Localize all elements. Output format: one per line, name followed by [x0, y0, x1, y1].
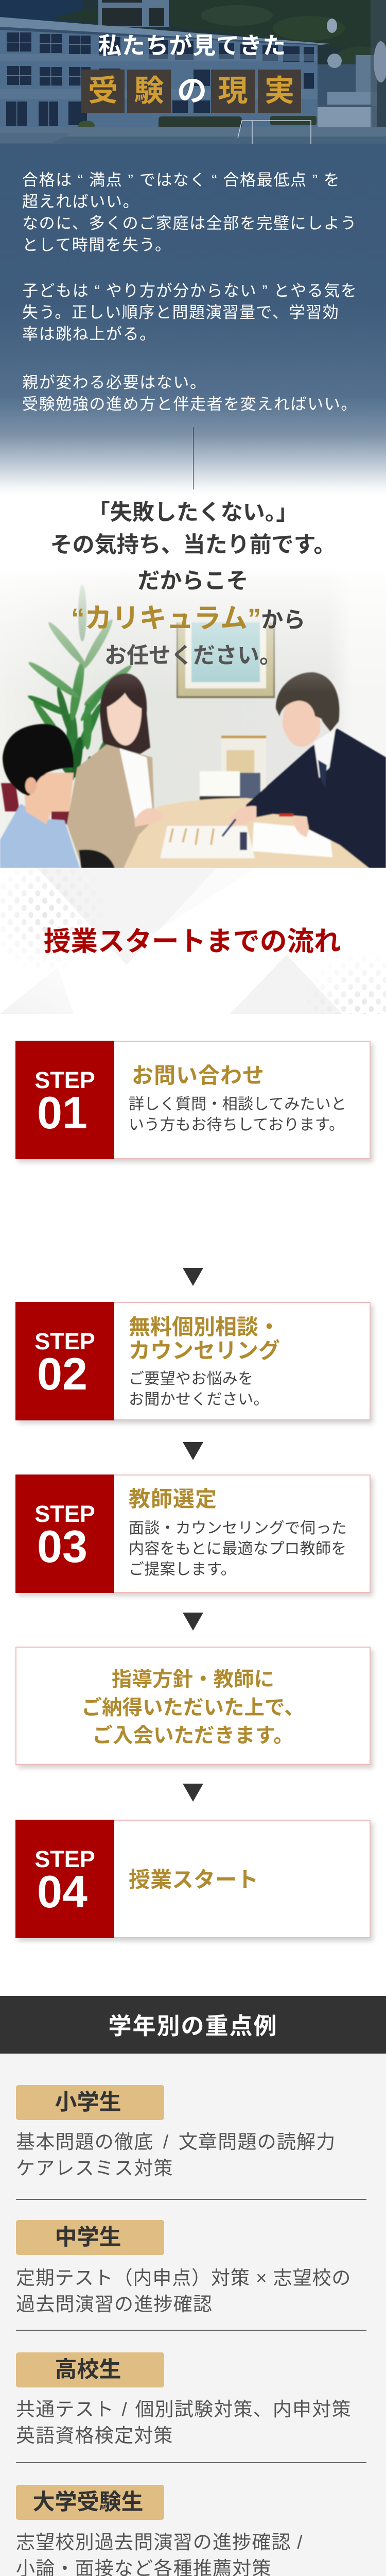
tag: university candidates: 大学受験生 — [33, 2490, 143, 2515]
notice text: ご納得いただいた上で、 — [82, 1696, 304, 1719]
teacher — [246, 728, 386, 868]
step description: ご要望やお悩みを — [129, 1370, 253, 1387]
panel: grade focus background — [0, 2054, 386, 2576]
table — [116, 798, 369, 868]
step description: 詳しく質問・相談してみたいと — [129, 1096, 346, 1113]
text: elementary focus: ケアレスミス対策 — [16, 2158, 173, 2178]
text block: paragraph 1: 超えればいい。 — [22, 193, 139, 211]
tag: elementary — [16, 2085, 164, 2120]
papers — [160, 826, 255, 858]
text: elementary focus — [16, 2131, 336, 2178]
goal — [238, 121, 311, 144]
step description: いう方もお待ちしております。 — [129, 1116, 344, 1133]
text block: paragraph 3: 親が変わる必要はない。 — [22, 374, 207, 392]
text block: paragraph 2: 子どもは “ やり方が分からない ” とやる気を — [22, 282, 357, 300]
line: だからこそ: だからこそ — [138, 569, 248, 594]
text: elementary focus: 基本問題の徹底 / 文章問題の読解力 — [16, 2131, 336, 2153]
step title: 授業スタート — [129, 1868, 258, 1892]
tag: elementary: 小学生 — [55, 2090, 121, 2115]
step description: 内容をもとに最適なプロ教師を — [129, 1540, 347, 1557]
step description: ご提案します。 — [129, 1561, 236, 1578]
white character の: の — [177, 74, 207, 108]
text: high school focus: 共通テスト / 個別試験対策、内申対策 — [16, 2399, 352, 2420]
arrow — [183, 1442, 203, 1460]
badge character 受 — [81, 70, 125, 113]
badge character 現 — [211, 70, 255, 113]
text block: paragraph 1 — [22, 171, 357, 254]
badge character 現: 現 — [218, 74, 248, 108]
woman — [100, 673, 150, 755]
line: お任せください: お任せください。 — [104, 643, 282, 668]
step title: カウンセリング — [129, 1338, 280, 1363]
decorative background: triangles and dots — [0, 868, 386, 1014]
notice text: 指導方針・教師に — [112, 1668, 274, 1691]
title: 私たちが見てきた — [98, 32, 286, 59]
text block: paragraph 2 — [22, 282, 357, 343]
step label: STEP — [34, 1067, 95, 1093]
badge character 験: 験 — [134, 74, 164, 108]
step badge 04 — [15, 1820, 114, 1938]
step number: 01 — [37, 1087, 87, 1138]
brochure — [221, 736, 266, 801]
step card 01 — [15, 1041, 371, 1159]
text: junior high focus: 定期テスト（内申点）対策 × 志望校の — [16, 2267, 351, 2289]
line: 失敗したくない: 「失敗したくない。」 — [88, 500, 298, 525]
step number: 03 — [37, 1521, 87, 1572]
consultation photo — [0, 584, 386, 868]
step card 02 — [15, 1302, 371, 1420]
text: high school focus: 英語資格検定対策 — [16, 2425, 173, 2446]
arrow — [183, 1613, 203, 1631]
text block: paragraph 2: 失う。正しい順序と問題演習量で、学習効 — [22, 303, 339, 321]
step description — [129, 1370, 269, 1408]
school building photo — [0, 0, 386, 144]
arrow — [183, 1784, 203, 1802]
wall — [0, 28, 318, 131]
step title — [129, 1315, 280, 1363]
heading badge: 受験の現実 — [81, 70, 301, 113]
text block: paragraph 1: として時間を失う。 — [22, 236, 172, 254]
calendar — [200, 771, 240, 801]
tag: high school — [16, 2352, 164, 2387]
text block: paragraph 1: 合格は “ 満点 ” ではなく “ 合格最低点 ” を — [22, 171, 340, 189]
boy — [0, 804, 80, 868]
text: high school focus — [16, 2399, 352, 2446]
step label: STEP — [34, 1328, 95, 1354]
arrow — [183, 1268, 203, 1286]
vertical connector line — [192, 427, 194, 489]
badge character 実 — [258, 70, 301, 113]
tower — [98, 0, 169, 27]
text block: paragraph 2: 率は跳ね上がる。 — [22, 325, 156, 343]
tag: high school: 高校生 — [55, 2358, 121, 2382]
plant — [26, 585, 134, 800]
badge character 験 — [127, 70, 171, 113]
section heading bar: 学年別の重点例: 学年別の重点例 — [108, 2013, 278, 2039]
windows — [6, 32, 314, 126]
step badge 02 — [15, 1302, 114, 1420]
tag: junior high: 中学生 — [55, 2225, 121, 2250]
step description — [129, 1096, 346, 1133]
text block: paragraph 1: なのに、多くのご家庭は全部を完璧にしよう — [22, 214, 357, 232]
step badge 01 — [15, 1041, 114, 1159]
step title: 無料個別相談・ — [129, 1315, 280, 1339]
text block: paragraph 3: 受験勉強の進め方と伴走者を変えればいい。 — [22, 395, 358, 413]
line: その気持ち: その気持ち、当たり前です。 — [50, 533, 336, 557]
step badge 03 — [15, 1475, 114, 1593]
notice text: ご入会いただきます。 — [92, 1724, 294, 1747]
notice text — [82, 1668, 304, 1747]
tag: junior high — [16, 2220, 164, 2255]
text: junior high focus: 過去問演習の進捗確認 — [16, 2294, 213, 2314]
badge character 受: 受 — [88, 74, 118, 108]
step number: 04 — [37, 1866, 87, 1917]
line: カリキュラムから: “カリキュラム”から — [71, 603, 305, 634]
step card 04 — [15, 1820, 371, 1938]
section background: navy to white gradient — [0, 144, 386, 495]
step number: 02 — [37, 1348, 87, 1399]
step title: お問い合わせ — [132, 1063, 265, 1088]
step description — [129, 1520, 347, 1578]
step label: STEP — [34, 1846, 95, 1872]
chair — [1, 783, 20, 811]
step description: お聞かせください。 — [129, 1391, 269, 1408]
step description: 面談・カウンセリングで伺った — [129, 1520, 347, 1537]
step title: 教師選定 — [129, 1487, 217, 1511]
text: university focus: 志望校別過去問演習の進捗確認 / — [16, 2532, 303, 2553]
painting — [177, 622, 275, 698]
right low building — [318, 64, 356, 106]
step label: STEP — [34, 1501, 95, 1527]
shrubs and ground — [159, 116, 242, 130]
text: junior high focus — [16, 2267, 351, 2314]
notice card — [15, 1647, 371, 1765]
text block: paragraph 3 — [22, 374, 358, 413]
section heading: 授業スタートまでの流れ: 授業スタートまでの流れ — [44, 926, 341, 957]
section heading bar: 学年別の重点例 — [0, 1996, 386, 2054]
step card 03 — [15, 1475, 371, 1593]
text: university focus — [16, 2532, 303, 2576]
badge character 実: 実 — [265, 74, 294, 108]
headline: reassurance message — [50, 500, 336, 668]
tag: university candidates — [16, 2485, 164, 2520]
black chair — [79, 850, 115, 868]
